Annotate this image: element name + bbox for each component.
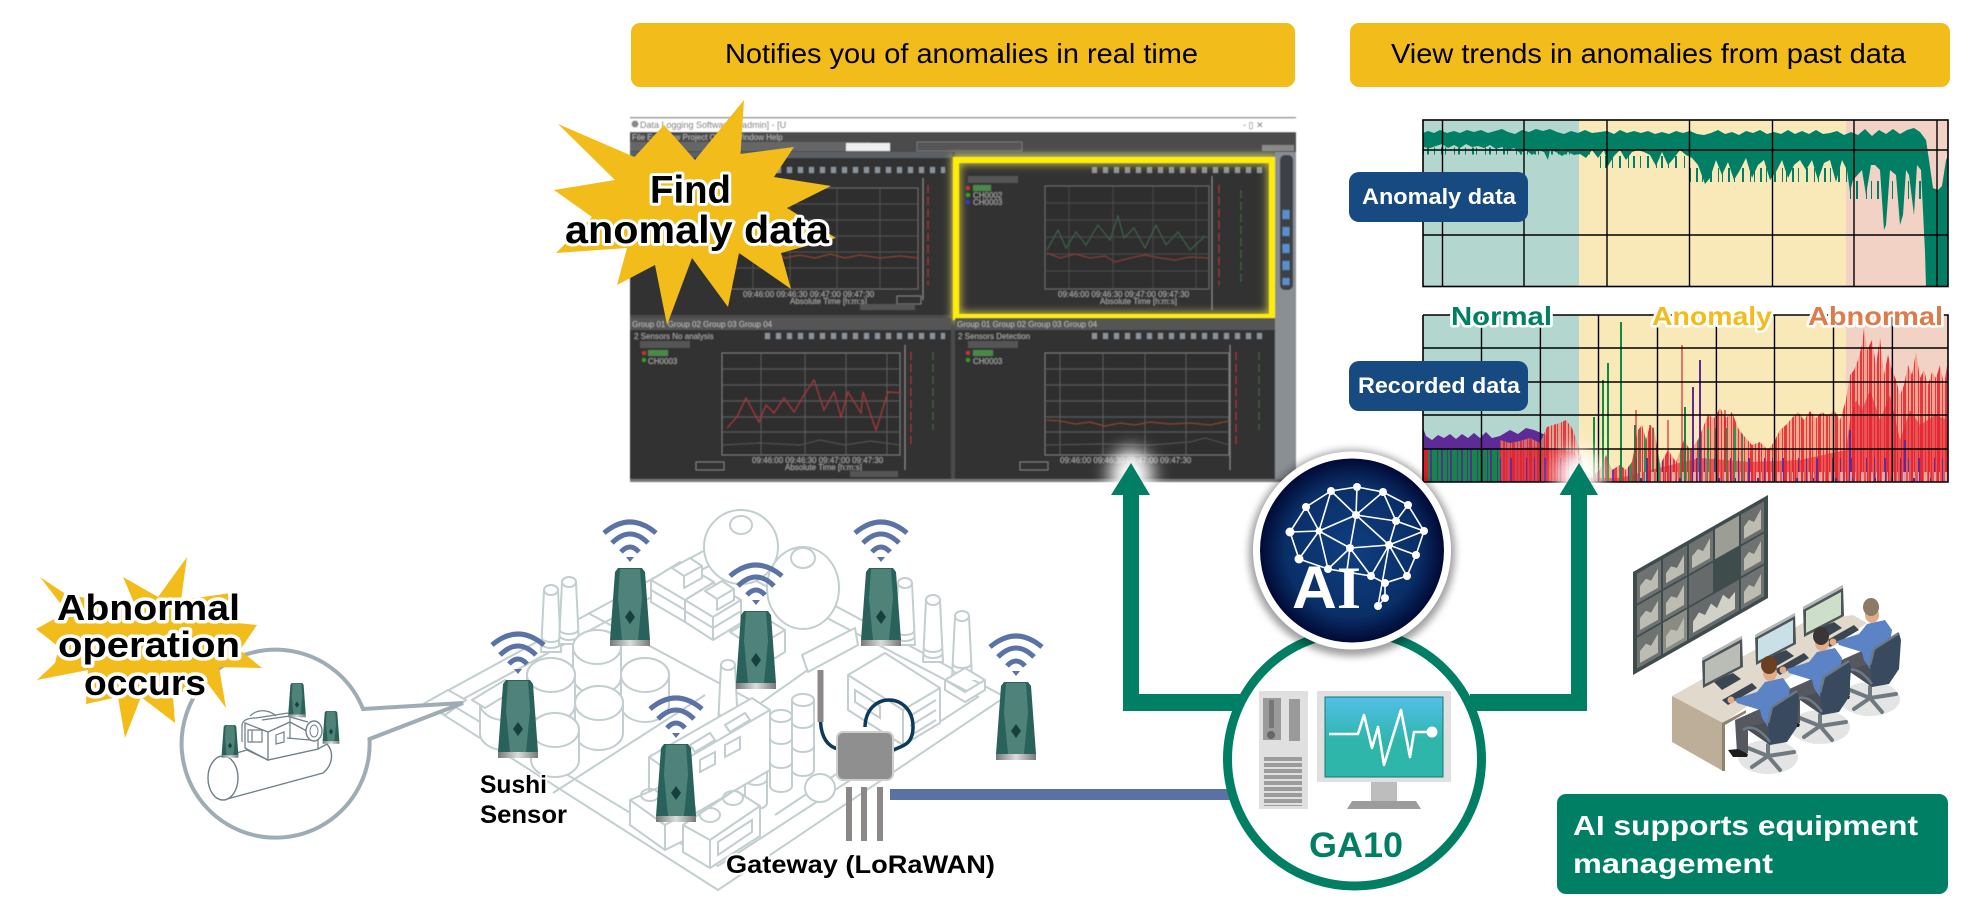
chart window: top right highlighted bbox=[955, 158, 1275, 318]
arrow: GA10 to trend charts bbox=[1470, 449, 1601, 711]
callout: Abnormal operation occurs burst: occurs bbox=[84, 662, 206, 703]
illustration: control room operators bbox=[1633, 495, 1901, 774]
operator desk bbox=[1672, 615, 1867, 771]
panel: factory site with sensors bbox=[425, 510, 1042, 890]
chart window: bottom left: Absolute Time [h:m:s] bbox=[785, 463, 862, 472]
callout: Find anomaly data burst: Find bbox=[650, 169, 731, 212]
chart window: bottom left: 09:46:00 09:46:30 09:47:00 09:47:30 bbox=[752, 456, 884, 465]
icon: wireless sushi sensors bbox=[492, 522, 1042, 822]
callout: Find anomaly data burst: anomaly data bbox=[565, 209, 829, 252]
chart window: top left bbox=[630, 158, 951, 315]
callout box: AI supports equipment management: management bbox=[1573, 848, 1773, 879]
chart window: bottom left bbox=[630, 318, 951, 480]
chart window: top right highlighted: Absolute Time [h:m:s] bbox=[1100, 297, 1177, 306]
chart window: top right highlighted: CH0003 bbox=[973, 198, 1003, 207]
legend: Anomaly stage: Anomaly bbox=[1652, 301, 1773, 331]
chart window: bottom left: Group 01 Group 02 Group 03 Group 04 bbox=[632, 320, 773, 329]
legend: Normal stage: Normal bbox=[1451, 301, 1552, 331]
chart window: bottom left: 2 Sensors No analysis bbox=[634, 332, 714, 341]
icon: compressor with sensors bbox=[208, 683, 339, 800]
chart window: bottom right: 2 Sensors Detection bbox=[958, 332, 1030, 341]
icon: PC tower bbox=[1259, 691, 1308, 809]
heading banner: past data: View trends in anomalies from past data bbox=[1391, 38, 1906, 69]
panel: GA10 software bbox=[1228, 632, 1482, 886]
panel: monitoring software screenshot: File Edit View Project Option Window Help bbox=[632, 133, 783, 142]
callout: equipment close-up bubble bbox=[182, 650, 463, 838]
chart window: bottom left: CH0003 bbox=[648, 357, 678, 366]
callout: Find anomaly data burst bbox=[554, 100, 836, 325]
label: Anomaly data: Anomaly data bbox=[1362, 184, 1517, 209]
label: Recorded data bbox=[1349, 361, 1528, 411]
callout: Abnormal operation occurs burst bbox=[36, 557, 262, 738]
icon: AI brain badge: AI bbox=[1292, 554, 1361, 621]
label: Recorded data: Recorded data bbox=[1358, 373, 1521, 398]
icon: AI brain badge bbox=[1249, 450, 1455, 656]
chart window: bottom right: CH0003 bbox=[973, 357, 1003, 366]
heading banner: past data bbox=[1350, 23, 1950, 87]
chart window: bottom right bbox=[955, 318, 1275, 480]
factory line illustration bbox=[425, 510, 1005, 890]
callout box: AI supports equipment management bbox=[1557, 794, 1948, 894]
icon: LoRaWAN gateway bbox=[818, 670, 913, 841]
label: Sushi Sensor: Sensor bbox=[480, 801, 567, 829]
chart window: top right highlighted: CH0002 bbox=[973, 191, 1003, 200]
chart window: top left: Absolute Time [h:m:s] bbox=[790, 297, 867, 306]
chart: recorded data trend bbox=[1423, 315, 1948, 482]
connector: gateway to GA10 bbox=[890, 789, 1235, 800]
video wall bbox=[1633, 495, 1768, 675]
label: Anomaly data bbox=[1349, 172, 1528, 222]
chart window: bottom right: 09:46:00 09:46:30 09:47:00 09:47:30 bbox=[1060, 456, 1192, 465]
label: Gateway (LoRaWAN): Gateway (LoRaWAN) bbox=[726, 851, 995, 879]
label: Sushi Sensor: Sushi bbox=[480, 771, 547, 799]
chart window: top right highlighted: 09:46:00 09:46:30 09:47:00 09:47:30 bbox=[1058, 290, 1190, 299]
panel: monitoring software screenshot: - ▯ ✕ bbox=[1243, 120, 1264, 130]
callout box: AI supports equipment management: AI supports equipment bbox=[1573, 810, 1918, 841]
arrow: GA10 to screenshot bbox=[1109, 449, 1240, 711]
panel: monitoring software screenshot: Data Logging Software - [admin] - [U bbox=[640, 120, 786, 130]
callout: Abnormal operation occurs burst: operation bbox=[58, 624, 240, 665]
icon: monitor with waveform bbox=[1317, 691, 1451, 809]
chart: anomaly data trend bbox=[1423, 120, 1948, 287]
heading banner: real time: Notifies you of anomalies in real time bbox=[725, 38, 1198, 69]
callout: Abnormal operation occurs burst: Abnormal bbox=[57, 587, 240, 628]
label: GA10: GA10 bbox=[1309, 826, 1403, 865]
legend: Abnormal stage: Abnormal bbox=[1808, 301, 1943, 331]
chart window: bottom right: Group 01 Group 02 Group 03 Group 04 bbox=[957, 320, 1098, 329]
highlight: anomaly window bbox=[956, 160, 1272, 317]
panel: monitoring software screenshot bbox=[630, 117, 1296, 482]
chart window: top left: 09:46:00 09:46:30 09:47:00 09:47:30 bbox=[743, 290, 875, 299]
heading banner: real time bbox=[631, 23, 1295, 87]
